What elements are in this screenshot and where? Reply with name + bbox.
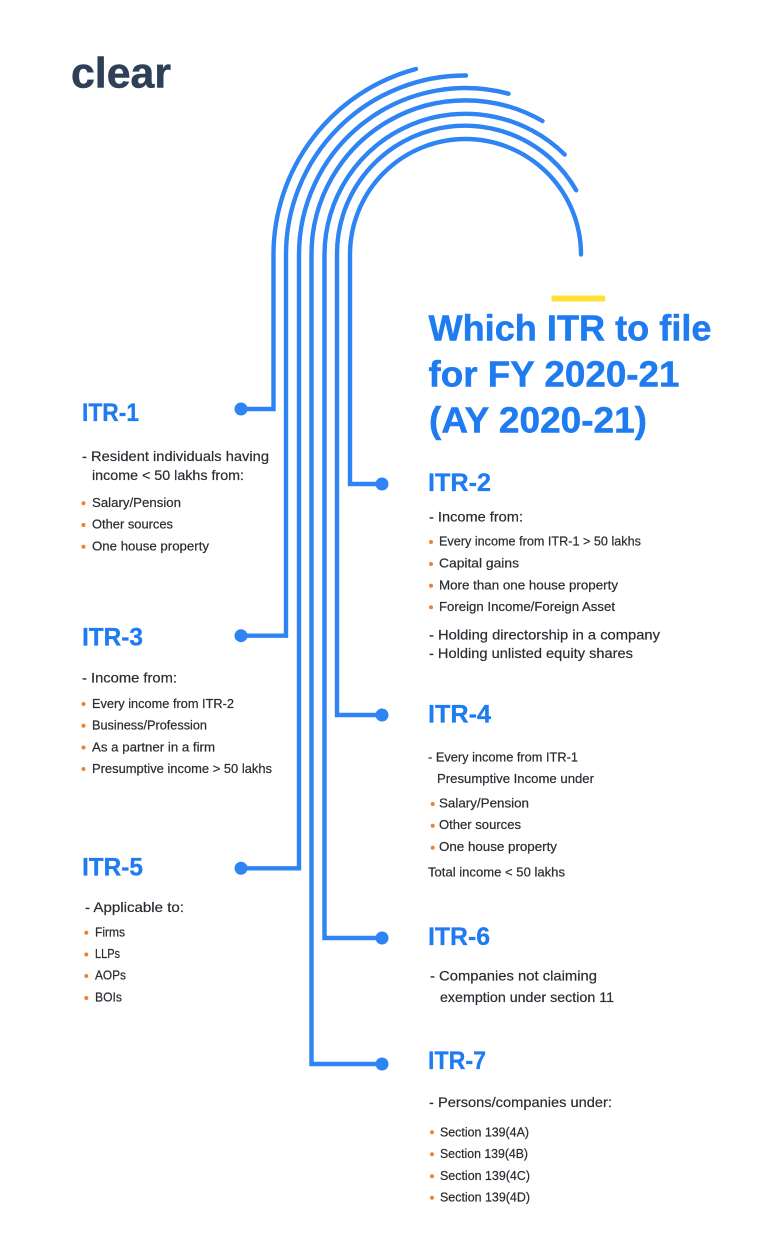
panel: ITR-4 — [428, 701, 594, 879]
list: ITR-4 — [431, 796, 558, 854]
list: ITR-2: Foreign Income/Foreign Asset — [439, 600, 616, 614]
heading: ITR-5: ITR-5 — [82, 854, 143, 882]
title: (AY 2020-21) — [429, 400, 647, 441]
heading: ITR-2: ITR-2 — [428, 469, 491, 497]
heading: ITR-3: ITR-3 — [82, 624, 143, 652]
list: ITR-3: Every income from ITR-2 — [92, 697, 234, 711]
list: ITR-7: Section 139(4A) — [440, 1126, 529, 1140]
description: ITR-5: - Applicable to: — [85, 899, 184, 915]
heading: ITR-1: ITR-1 — [82, 399, 139, 427]
line: ITR-3 connector — [241, 75, 466, 636]
panel: ITR-2 — [428, 469, 660, 661]
list: ITR-1 — [82, 496, 210, 553]
list: ITR-3: As a partner in a firm — [92, 740, 215, 754]
list: ITR-4: Other sources — [439, 818, 521, 832]
list: ITR-2: Every income from ITR-1 > 50 lakhs — [439, 535, 641, 549]
list: ITR-2: More than one house property — [439, 578, 619, 592]
line: ITR-5 connector — [241, 88, 508, 868]
panel: ITR-6 — [428, 923, 614, 1005]
notes: ITR-2: - Holding directorship in a company — [429, 626, 660, 642]
description: ITR-4: Presumptive Income under — [437, 772, 594, 786]
connector dots — [234, 402, 388, 1070]
description: ITR-4: - Every income from ITR-1 — [428, 750, 578, 764]
title — [428, 308, 712, 441]
description: ITR-2: - Income from: — [429, 509, 523, 525]
curved connector lines — [241, 69, 581, 1064]
list: ITR-2 — [429, 535, 641, 614]
description: ITR-1 — [82, 448, 269, 483]
line: ITR-7 connector — [311, 100, 542, 1064]
description: ITR-6 — [430, 967, 614, 1005]
line: ITR-1 connector — [241, 69, 416, 409]
title: Which ITR to file — [428, 308, 712, 348]
panel: ITR-3 — [82, 624, 272, 776]
heading: ITR-4: ITR-4 — [428, 701, 491, 729]
notes: ITR-2: - Holding unlisted equity shares — [429, 645, 633, 661]
list: ITR-7: Section 139(4D) — [440, 1191, 530, 1205]
notes: ITR-2 — [429, 626, 660, 661]
list: ITR-1: One house property — [92, 539, 210, 553]
line: ITR-2 connector — [350, 139, 581, 484]
list: ITR-3: Presumptive income > 50 lakhs — [92, 762, 272, 776]
list: ITR-4: One house property — [439, 840, 558, 854]
description: ITR-1: income < 50 lakhs from: — [92, 467, 244, 483]
line: ITR-6 connector — [324, 114, 565, 938]
list: ITR-2: Capital gains — [439, 556, 519, 570]
logo: clear: clear — [71, 50, 171, 98]
panel: ITR-1 — [82, 399, 269, 553]
list: ITR-3 — [82, 697, 272, 776]
description: ITR-7: - Persons/companies under: — [429, 1094, 612, 1110]
title: for FY 2020-21 — [428, 354, 680, 394]
list: ITR-4: Salary/Pension — [439, 796, 529, 810]
list: ITR-7: Section 139(4C) — [440, 1169, 530, 1183]
list: ITR-5 — [84, 925, 126, 1005]
description: ITR-1: - Resident individuals having — [82, 448, 269, 464]
panel: ITR-7 — [428, 1047, 612, 1205]
list: ITR-7 — [430, 1126, 530, 1205]
list: ITR-5: LLPs — [95, 947, 120, 961]
heading: ITR-7: ITR-7 — [428, 1047, 486, 1075]
list: ITR-1: Other sources — [92, 518, 173, 532]
description: ITR-6: exemption under section 11 — [440, 989, 614, 1005]
list: ITR-5: AOPs — [95, 969, 126, 983]
list: ITR-3: Business/Profession — [92, 718, 207, 732]
note: ITR-4: Total income < 50 lakhs — [428, 865, 565, 879]
list: ITR-1: Salary/Pension — [92, 496, 181, 510]
heading: ITR-6: ITR-6 — [428, 923, 490, 951]
panel: ITR-5 — [82, 854, 184, 1005]
list: ITR-5: BOIs — [95, 991, 122, 1005]
line: ITR-4 connector — [337, 126, 576, 715]
yellow accent bar — [552, 296, 605, 302]
description: ITR-6: - Companies not claiming — [430, 967, 597, 983]
list: ITR-5: Firms — [95, 925, 125, 939]
list: ITR-7: Section 139(4B) — [440, 1147, 528, 1161]
description: ITR-3: - Income from: — [82, 670, 177, 686]
description: ITR-4 — [428, 750, 594, 786]
